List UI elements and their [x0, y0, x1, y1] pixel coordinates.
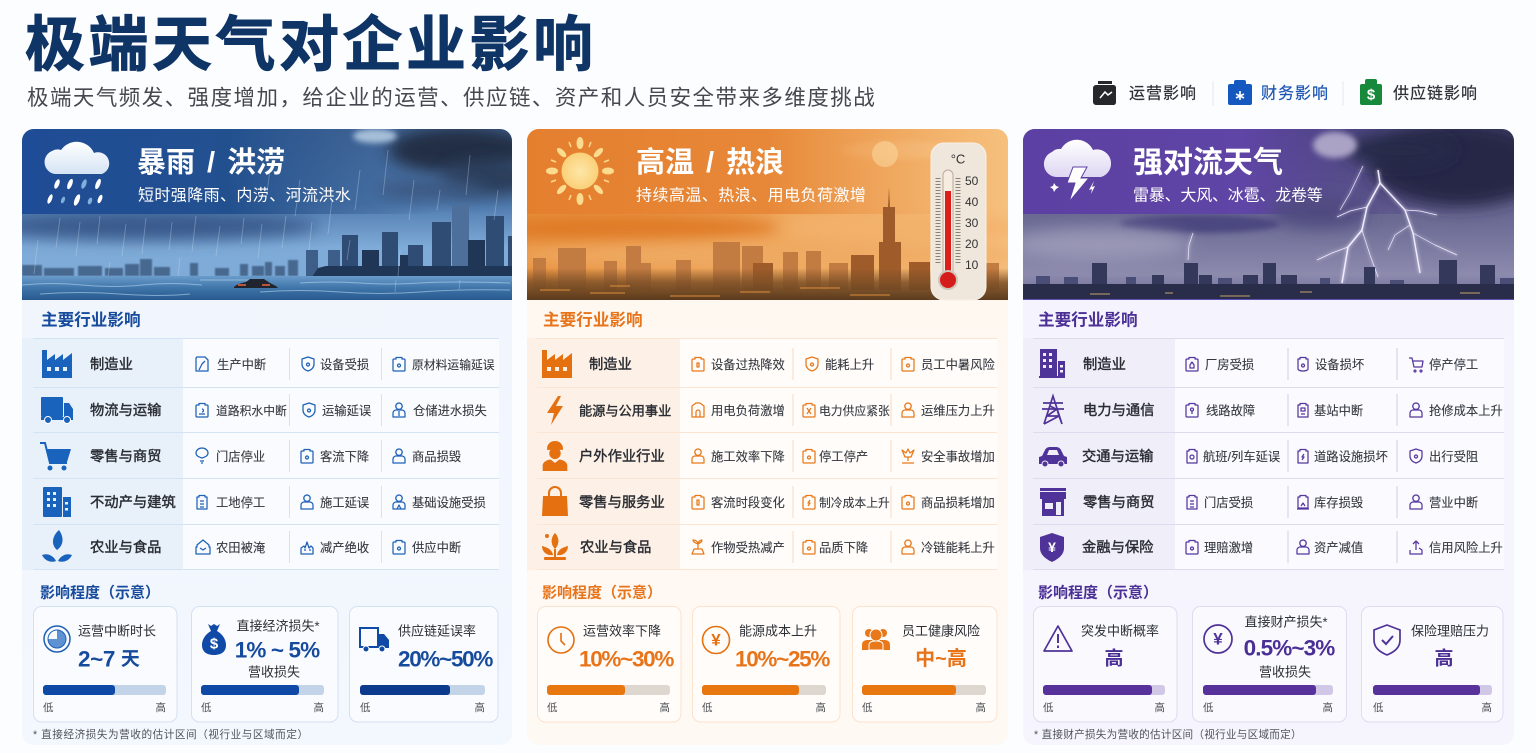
industry table [527, 338, 997, 570]
header image: thunderstorm [1023, 129, 1514, 300]
card: 保险理赔压力: 低 [1373, 701, 1384, 714]
card: 保险理赔压力: 高 [1434, 646, 1454, 670]
card: 员工健康风险: 员工健康风险 [902, 624, 980, 638]
row: 交通与运输: 出行受阻 [1429, 450, 1478, 464]
row: 农业与食品 [42, 530, 461, 562]
row: 农业与食品: 农业与食品 [90, 539, 161, 556]
row: 金融与保险: 信用风险上升 [1429, 540, 1503, 555]
card: 直接经济损失: 高 [314, 701, 324, 714]
card: 运营效率下降: 低 [547, 701, 558, 714]
icon: clock cycle [44, 626, 70, 652]
icon: factory [42, 350, 72, 378]
card: 能源成本上升: 10%~25% [735, 646, 830, 672]
card: 能源成本上升 [692, 606, 840, 722]
row: 交通与运输: 航班/列车延误 [1203, 449, 1280, 464]
icon: money bag: $ [210, 636, 219, 652]
icon: check shield [1374, 625, 1400, 655]
row: 电力与通信: 线路故障 [1206, 403, 1255, 418]
row: 物流与运输: 物流与运输 [90, 402, 161, 419]
flooded car [234, 279, 278, 288]
icon: delivery truck [360, 628, 389, 652]
row: 物流与运输 [41, 397, 487, 424]
section heading: 主要行业影响: 主要行业影响 [1038, 310, 1138, 330]
legend item: 供应链影响: 供应链影响 [1393, 84, 1478, 102]
card: 突发中断概率: 高 [1104, 646, 1124, 670]
card: 直接财产损失: 直接财产损失* [1244, 614, 1328, 630]
card: 直接财产损失: 营收损失 [1259, 664, 1311, 680]
row: 零售与服务业: 客流时段变化 [711, 495, 785, 510]
row: 金融与保险: 金融与保险 [1082, 539, 1153, 556]
row: 农业与食品: 作物受热减产 [711, 541, 785, 555]
section heading: 影响程度: 影响程度（示意） [1038, 584, 1158, 602]
row: 能源与公用事业: 电力供应紧张 [819, 404, 890, 418]
card: 保险理赔压力: 保险理赔压力 [1411, 624, 1489, 638]
legend item: 财务影响: 财务影响 [1261, 84, 1329, 102]
card: 供应链延误率: 高 [474, 701, 485, 714]
card: 直接财产损失: 低 [1203, 701, 1214, 714]
row: 零售与服务业 [542, 487, 995, 516]
title: 极端天气对企业影响 [25, 12, 596, 78]
row: 制造业: 原材料运输延误 [412, 358, 495, 372]
card: 运营中断时长: 高 [156, 701, 166, 714]
section heading: 主要行业影响: 主要行业影响 [41, 310, 141, 330]
card: 供应链延误率: 低 [360, 701, 371, 714]
icon: warning triangle [1044, 626, 1072, 651]
row: 零售与商贸: 客流下降 [320, 449, 369, 464]
rain [34, 150, 498, 292]
row: 能源与公用事业: 能源与公用事业 [579, 404, 671, 418]
row: 制造业: 制造业 [589, 356, 632, 373]
icon: storefront [1040, 488, 1066, 516]
icon: yen coin: ¥ [711, 630, 721, 650]
card: 运营效率下降: 高 [660, 701, 670, 714]
icon: truck [41, 397, 73, 424]
card: 直接经济损失 [192, 606, 338, 722]
row: 农业与食品: 农田被淹 [216, 541, 265, 555]
header subtitle: 持续高温、热浪、用电负荷激增 [636, 186, 866, 204]
row: 制造业: 设备过热降效 [711, 357, 785, 372]
thermometer: 20 [965, 237, 979, 251]
row: 制造业 [42, 350, 495, 378]
thermometer [931, 143, 986, 300]
row: 农业与食品: 冷链能耗上升 [921, 540, 995, 555]
card: 供应链延误率 [350, 606, 498, 722]
icon: worker [543, 441, 567, 471]
card: 突发中断概率: 高 [1154, 701, 1165, 714]
icon: office building [43, 487, 71, 517]
industry table [22, 338, 499, 570]
footnote: * 直接财产损失为营收的估计区间（视行业与区域而定） [1034, 728, 1302, 741]
card: 直接经济损失: 低 [201, 701, 212, 714]
header title: 暴雨 / 洪涝 [137, 146, 285, 179]
icon: yen coin: ¥ [1213, 630, 1223, 648]
panel: 高温 / 热浪 [527, 129, 1008, 745]
icon: factory [542, 350, 572, 378]
card: 运营中断时长: 运营中断时长 [78, 624, 156, 638]
row: 物流与运输: 道路积水中断 [216, 404, 287, 418]
card: 突发中断概率 [1034, 606, 1177, 722]
row: 零售与服务业: 商品损耗增加 [921, 495, 995, 510]
thermometer: 10 [965, 258, 979, 272]
header title: 强对流天气 [1133, 146, 1283, 180]
row: 户外作业行业 [543, 441, 995, 471]
thermometer: 30 [965, 216, 979, 230]
card: 能源成本上升: 高 [816, 701, 826, 714]
row: 金融与保险: 资产减值 [1314, 540, 1363, 555]
card: 运营效率下降: 运营效率下降 [583, 624, 661, 638]
legend [1093, 79, 1478, 106]
card: 能源成本上升: 低 [702, 701, 713, 714]
row: 制造业: 生产中断 [217, 357, 266, 372]
row: 零售与商贸: 门店停业 [216, 449, 265, 464]
row: 能源与公用事业: 用电负荷激增 [711, 403, 785, 418]
card: 员工健康风险: 中~高 [915, 646, 967, 670]
row: 电力与通信: 电力与通信 [1083, 402, 1154, 419]
legend item: 财务影响 [1228, 80, 1329, 105]
card: 运营中断时长 [34, 606, 177, 722]
row: 制造业: 员工中暑风险 [921, 357, 995, 372]
row: 零售与商贸: 零售与商贸 [90, 448, 161, 465]
icon: sprout [542, 533, 568, 560]
card: 供应链延误率: 20%~50% [398, 646, 493, 672]
footnote: * 直接经济损失为营收的估计区间（视行业与区域而定） [33, 728, 309, 741]
icon: yen coin [1204, 625, 1232, 653]
section heading: 主要行业影响: 主要行业影响 [543, 310, 643, 330]
card: 运营效率下降 [538, 606, 681, 722]
row: 农业与食品: 供应中断 [412, 540, 461, 555]
legend item: 运营影响: 运营影响 [1129, 84, 1197, 102]
card: 直接经济损失: 1% ~ 5% [235, 638, 320, 662]
card: 保险理赔压力 [1362, 606, 1503, 722]
band overlay [1023, 129, 1420, 214]
card: 直接经济损失: 营收损失 [248, 664, 300, 680]
row: 交通与运输: 道路设施损坏 [1314, 449, 1388, 464]
icon: leaf [42, 530, 72, 562]
card: 直接财产损失: 高 [1322, 701, 1333, 714]
section heading: 影响程度: 影响程度（示意） [542, 584, 662, 602]
thermometer: 50 [965, 174, 979, 188]
row: 电力与通信 [1042, 396, 1503, 424]
row: 不动产与建筑: 不动产与建筑 [90, 494, 176, 511]
row: 制造业 [542, 350, 995, 378]
row: 能源与公用事业: 运维压力上升 [921, 404, 995, 418]
card: 直接经济损失: 直接经济损失* [236, 618, 320, 634]
panel: 强对流天气 [1010, 123, 1536, 745]
card: 直接财产损失 [1192, 606, 1346, 722]
row: 制造业: 停产停工 [1429, 357, 1478, 372]
icon: storm cloud [1044, 140, 1111, 202]
icon: power tower [1042, 396, 1064, 424]
icon: yen shield: ¥ [1048, 539, 1056, 555]
row: 制造业 [1039, 349, 1478, 378]
row: 零售与商贸: 库存损毁 [1314, 495, 1363, 510]
row: 零售与服务业: 零售与服务业 [579, 494, 665, 511]
header subtitle: 雷暴、大风、冰雹、龙卷等 [1133, 186, 1323, 204]
row: 物流与运输: 运输延误 [322, 403, 371, 418]
row: 零售与商贸: 零售与商贸 [1083, 494, 1154, 511]
row: 户外作业行业: 施工效率下降 [711, 449, 785, 464]
row: 农业与食品: 农业与食品 [580, 539, 651, 556]
header title: 高温 / 热浪 [636, 146, 784, 179]
card: 员工健康风险: 低 [862, 701, 873, 714]
hazy sun [872, 141, 898, 167]
panel: 暴雨 / 洪涝 [0, 126, 540, 745]
icon: money bag [202, 624, 226, 655]
card: 保险理赔压力: 高 [1482, 701, 1492, 714]
legend item: 供应链影响: $ [1367, 86, 1376, 104]
card: 能源成本上升: 能源成本上升 [739, 624, 817, 638]
row: 制造业: 制造业 [90, 356, 133, 373]
header image: flooded city [22, 129, 512, 300]
row: 零售与商贸: 营业中断 [1429, 495, 1478, 510]
icon: cart [40, 443, 71, 470]
row: 制造业: 能耗上升 [825, 358, 874, 372]
legend item: 供应链影响 [1360, 79, 1478, 105]
lightning [1188, 166, 1457, 283]
card: 供应链延误率: 供应链延误率 [398, 624, 476, 638]
row: 户外作业行业: 安全事故增加 [921, 449, 995, 464]
band overlay [527, 129, 944, 214]
icon: yen shield [1040, 533, 1064, 562]
row: 电力与通信: 抢修成本上升 [1429, 403, 1503, 418]
row: 户外作业行业: 户外作业行业 [579, 448, 665, 465]
section heading: 影响程度: 影响程度（示意） [40, 584, 160, 602]
icon: yen coin [702, 626, 730, 654]
icon: sun [546, 137, 614, 205]
card: 运营效率下降: 10%~30% [579, 646, 674, 672]
row: 金融与保险 [1040, 533, 1503, 562]
row: 制造业: 设备损坏 [1315, 358, 1364, 372]
row: 交通与运输 [1039, 447, 1478, 467]
icon: rain cloud [45, 142, 109, 206]
icon: clock [548, 627, 574, 653]
row: 零售与商贸 [40, 443, 461, 470]
subtitle: 极端天气频发、强度增加，给企业的运营、供应链、资产和人员安全带来多维度挑战 [27, 86, 876, 110]
card: 员工健康风险: 高 [976, 701, 986, 714]
row: 电力与通信: 基站中断 [1314, 403, 1363, 418]
row: 能源与公用事业 [547, 396, 995, 425]
row: 不动产与建筑 [43, 487, 486, 517]
header subtitle: 短时强降雨、内涝、河流洪水 [138, 186, 351, 204]
row: 农业与食品: 品质下降 [819, 541, 868, 555]
card: 员工健康风险 [852, 606, 997, 722]
card: 运营中断时长: 2~7 天 [78, 646, 140, 672]
row: 户外作业行业: 停工停产 [819, 449, 868, 464]
thermometer: °C [951, 152, 965, 166]
row: 零售与服务业: 制冷成本上升 [819, 496, 890, 510]
icon: people [862, 629, 890, 650]
row: 农业与食品: 减产绝收 [320, 540, 369, 555]
row: 物流与运输: 仓储进水损失 [413, 403, 487, 418]
band overlay [22, 129, 404, 214]
card: 直接财产损失: 0.5%~3% [1244, 636, 1335, 660]
row: 农业与食品 [542, 533, 995, 560]
thermometer: 40 [965, 195, 979, 209]
industry table [1023, 338, 1504, 570]
row: 交通与运输: 交通与运输 [1082, 447, 1153, 465]
row: 不动产与建筑: 施工延误 [320, 496, 369, 510]
row: 不动产与建筑: 工地停工 [216, 495, 265, 510]
row: 零售与商贸: 门店受损 [1204, 495, 1253, 510]
icon: office building [1039, 349, 1065, 378]
card: 突发中断概率: 突发中断概率 [1081, 624, 1159, 638]
legend item: 运营影响 [1093, 81, 1197, 105]
icon: shopping bag [542, 487, 568, 516]
icon: lightning [547, 396, 563, 425]
row: 金融与保险: 理赔激增 [1204, 540, 1253, 555]
icon: car [1039, 447, 1067, 467]
row: 制造业: 设备受损 [320, 358, 369, 372]
card: 运营中断时长: 低 [43, 701, 54, 714]
row: 零售与商贸 [1040, 488, 1478, 516]
row: 制造业: 厂房受损 [1205, 357, 1254, 372]
row: 制造业: 制造业 [1083, 356, 1126, 373]
row: 零售与商贸: 商品损毁 [412, 449, 461, 464]
card: 突发中断概率: 低 [1043, 701, 1054, 714]
row: 不动产与建筑: 基础设施受损 [412, 496, 486, 510]
header image: hot city skyline [527, 129, 1008, 300]
